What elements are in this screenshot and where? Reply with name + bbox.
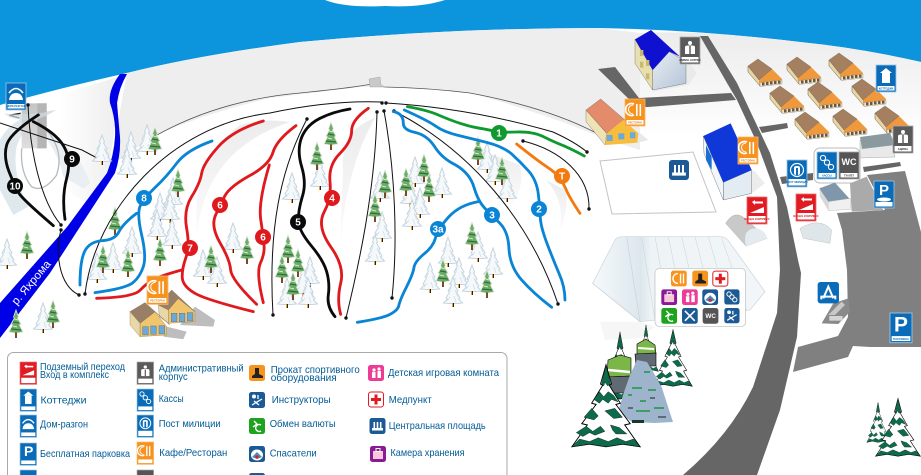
run 1 green [407,107,584,156]
run number badges: 10 [9,182,21,192]
sky [0,0,921,105]
sign: warm-up house, top left [6,83,26,110]
legend column 4: Детская игровая комната [388,367,499,379]
run number badges: 7 [187,244,193,254]
legend column 4: Центральная площадь [389,420,486,432]
cash and WC group [814,148,860,183]
sign: underground passage one [744,197,770,224]
run 2 blue [404,110,565,300]
second blue roof building [703,123,765,200]
legend column 3: Инструкторы [272,394,331,406]
legend column 1: Дом-разгон [40,418,88,430]
run number badges: 5 [295,218,301,228]
legend column 1: P [24,443,33,459]
hall services panel [655,268,746,327]
legend column 1: Бесплатная парковка [40,448,130,460]
icon: central square [669,160,689,180]
grey office roof [860,133,895,149]
sign: underground passage two: ВХОД В КОМПЛЕКС [793,214,819,218]
run number badges [7,125,570,256]
legend column 4: Камера хранения [390,447,464,459]
river label: р. Яхрома [10,258,54,308]
legend panel [8,352,507,475]
legend column 2: Кафе/Ресторан [159,447,227,459]
legend column 1 [20,361,130,475]
run number badges: 4 [329,194,335,204]
sign: parking near ticket house: P [879,182,889,199]
cloud at top [325,0,445,6]
cottages [748,53,909,140]
slope shading, mountain background [60,28,921,250]
river Yakhroma [0,74,127,338]
central square [600,152,716,214]
run 3 blue [393,112,552,307]
sign: warm-up house, top left: ДОМ-РАЗГОН [7,104,25,108]
sign: admin, east: АДМИН. [898,147,908,151]
sign: police [786,160,808,187]
sign: admin, east [893,126,913,153]
legend column 3: оборудования [271,372,337,384]
sign: police: ПОСТ МИЛИЦИИ [786,180,808,184]
legend column 1: Вход в комплекс [40,369,109,381]
sign: parking east: P [894,314,908,337]
ski runs, left part [5,115,296,312]
sign: parking east: ПАРКОВКА [893,337,909,341]
run 10 black [5,115,53,226]
legend column 3: Обмен валюты [270,418,336,430]
trees on slopes [0,122,516,338]
legend column 4: Медпункт [389,394,432,406]
hotel with salmon roof [586,99,648,145]
small ticket house [819,177,883,212]
horizon ridge with top station [0,77,600,158]
indoor hall [593,237,765,340]
run number badges: T [559,172,565,182]
legend column 2 [137,362,244,475]
roads [598,36,921,475]
run number badges: 2 [536,204,542,216]
run 5 black [298,109,350,317]
cash and WC group: ТУАЛЕТ [844,174,854,178]
main road [683,36,801,475]
run number badges: 3 [489,210,495,222]
restaurant with two houses, lower slope [130,276,215,339]
sign: restaurant at hotel: РЕСТОРАН [628,120,642,124]
sign: parking near ticket house [874,181,894,208]
sign: restaurant on slope: РЕСТОРАН [150,299,165,303]
cash and WC group: WC [842,157,857,167]
legend column 2: Кассы [159,393,184,405]
legend column 3: Спасатели [270,448,317,460]
sign: restaurant at second building: РЕСТОРАН [741,158,755,162]
side road to hotels [598,67,736,107]
ski runs, right part [298,107,584,322]
lifts [26,101,591,320]
run number badges: 6 [260,232,266,244]
sign: restaurant at hotel [625,99,645,126]
road east [863,162,901,172]
run number badges: 9 [69,154,75,166]
grey office building [860,133,895,158]
administrative building, blue roof [635,30,697,92]
sign: admin building: АДМИН. КОРПУС [679,58,701,62]
run number badges: 6 [217,200,223,212]
underground entrance domes [726,215,832,246]
legend column 2: Административный [159,362,244,374]
hall services panel: WC [705,313,716,320]
side road to cottages [759,123,788,133]
sign: underground passage two [793,194,819,221]
sign: cottages: КОТТЕДЖИ [879,86,893,90]
ski jump complex [0,103,90,215]
large fir trees foreground [572,325,920,456]
legend column 2: Пост милиции [159,418,221,430]
sign: cottages [876,65,896,92]
sign: admin building [679,37,701,64]
run number badges: 8 [141,194,147,204]
legend column 1: Подземный переход [40,361,125,373]
legend column 1: Коттеджи [40,394,87,406]
sign: parking east [890,313,912,343]
legend column 2: корпус [159,371,188,383]
run 8 blue [80,141,212,293]
legend column 3 [249,364,360,475]
run 4 red [321,108,368,314]
legend column 3: Прокат спортивного [271,364,360,376]
run 9 black [33,122,69,219]
sign: underground passage one: ВХОД В КОМПЛЕКС [744,217,770,221]
lift station and sign [818,282,850,324]
car park area [793,171,921,372]
run number badges: 3а [432,224,444,236]
legend column 4 [368,365,499,462]
run 7 red [97,121,263,312]
run 6 red [214,126,296,304]
cash and WC group: КАССЫ [822,174,832,178]
run number badges: 1 [496,128,502,140]
access road to car park [780,173,813,184]
sign: restaurant at second building [738,137,758,164]
run 3a blue [357,202,478,322]
run T orange [517,144,580,213]
